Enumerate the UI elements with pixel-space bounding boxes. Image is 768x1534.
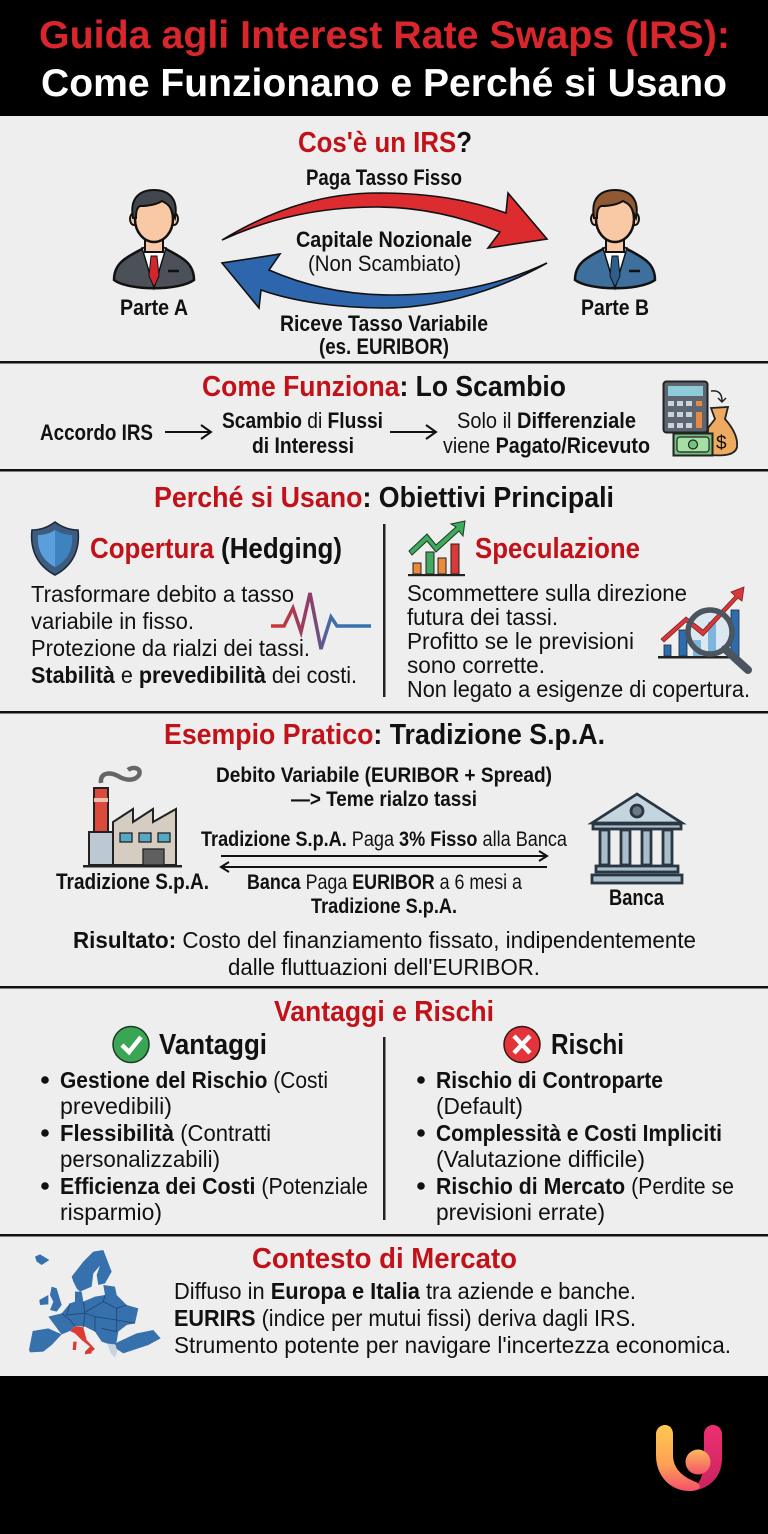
- body text: Scommettere sulla direzione: [407, 580, 687, 606]
- icon: logo: [656, 1425, 722, 1491]
- list: vantaggi: risparmio): [60, 1199, 162, 1225]
- icon: factory: [83, 768, 182, 868]
- list: rischi: previsioni errate): [436, 1199, 605, 1225]
- text: debito variabile: —> Teme rialzo tassi: [291, 788, 477, 811]
- heading: Vantaggi e Rischi: [274, 996, 494, 1028]
- column: copertura: [31, 522, 371, 688]
- icon: cross: [504, 1026, 540, 1062]
- subheading: rischi: Rischi: [551, 1029, 624, 1061]
- label: riceve tasso variabile: Riceve Tasso Variabile: [280, 311, 488, 336]
- list: rischi: (Default): [436, 1093, 523, 1119]
- text: risultato: dalle fluttuazioni dell'EURIBOR.: [228, 954, 540, 980]
- list: rischi: Complessità e Costi Impliciti: [436, 1120, 722, 1146]
- label: parte B: Parte B: [581, 295, 649, 320]
- panel: esempio pratico: [0, 711, 768, 987]
- text: market context: EURIRS (indice per mutui fissi) deriva dagli IRS.: [174, 1305, 636, 1331]
- subheading: copertura: Copertura (Hedging): [90, 533, 342, 565]
- body text: Trasformare debito a tasso: [31, 581, 294, 607]
- divider: [383, 1037, 386, 1220]
- text: debito variabile: Debito Variabile (EURIBOR + Spread): [216, 764, 552, 787]
- list: rischi: Rischio di Mercato (Perdite se: [436, 1173, 734, 1199]
- header band: [0, 0, 768, 116]
- title line 1: Guida agli Interest Rate Swaps (IRS):: [39, 14, 730, 57]
- label: es. euribor: (es. EURIBOR): [319, 334, 449, 359]
- label: parte A: Parte A: [120, 295, 188, 320]
- body text: sono corrette.: [407, 652, 545, 678]
- text: banca paga: [247, 871, 522, 918]
- step: solo il differenziale: viene Pagato/Ricevuto: [443, 433, 650, 458]
- step: accordo IRS: Accordo IRS: [40, 420, 153, 445]
- icon: europe map: [29, 1250, 161, 1358]
- arrow: step 1 to 2: [165, 425, 211, 439]
- step: solo il differenziale: [443, 408, 650, 458]
- label: banca: Banca: [609, 885, 665, 910]
- body text: Profitto se le previsioni: [407, 628, 634, 654]
- icon: magnifier chart: [658, 587, 748, 670]
- list: vantaggi: Efficienza dei Costi (Potenziale: [60, 1173, 368, 1199]
- step: scambio di flussi: Scambio di Flussi: [222, 408, 383, 433]
- step: scambio di flussi: [222, 408, 383, 458]
- panel: cos'è un IRS: [0, 116, 768, 362]
- body text: Stabilità e prevedibilità dei costi.: [31, 662, 357, 688]
- body text: [407, 580, 750, 702]
- list: vantaggi: prevedibili): [60, 1093, 172, 1119]
- panel: vantaggi e rischi: [0, 986, 768, 1235]
- list: rischi: [417, 1067, 734, 1225]
- heading: Cos'è un IRS?: [298, 127, 472, 159]
- text: banca paga: Banca Paga EURIBOR a 6 mesi a: [247, 871, 522, 894]
- footer band: [0, 1376, 768, 1534]
- text: risultato: [73, 927, 696, 980]
- heading: Esempio Pratico: Tradizione S.p.A.: [164, 719, 605, 751]
- text: market context: [174, 1278, 731, 1358]
- text: debito variabile: [216, 764, 552, 811]
- panel: perché si usano: [0, 469, 768, 712]
- list: rischi: (Valutazione difficile): [436, 1146, 645, 1172]
- arrow: red fixed rate: [222, 193, 547, 248]
- list: vantaggi: personalizzabili): [60, 1146, 220, 1172]
- body text: futura dei tassi.: [407, 604, 558, 630]
- step: solo il differenziale: Solo il Differenziale: [457, 408, 636, 433]
- text: banca paga: Tradizione S.p.A.: [311, 895, 457, 918]
- text: market context: Diffuso in Europa e Italia tra aziende e banche.: [174, 1278, 636, 1304]
- icon: person A: [114, 190, 194, 288]
- arrow: to company: [221, 862, 547, 872]
- list: vantaggi: Flessibilità (Contratti: [60, 1120, 271, 1146]
- arrow: to bank: [221, 851, 547, 861]
- body text: Non legato a esigenze di copertura.: [407, 676, 750, 702]
- label: paga tasso fisso: Paga Tasso Fisso: [306, 165, 462, 190]
- panel: contesto di mercato: [0, 1234, 768, 1376]
- heading: Come Funziona: Lo Scambio: [202, 371, 566, 403]
- icon: calculator and money: [664, 382, 737, 456]
- step: scambio di flussi: di Interessi: [252, 433, 354, 458]
- divider: [383, 524, 386, 697]
- body text: [31, 581, 357, 688]
- column: speculazione: [407, 521, 750, 702]
- icon: calculator and money: $: [716, 433, 727, 454]
- body text: variabile in fisso.: [31, 608, 194, 634]
- title line 2: Come Funzionano e Perché si Usano: [41, 62, 727, 105]
- body text: Protezione da rialzi dei tassi.: [31, 635, 310, 661]
- label: non scambiato: (Non Scambiato): [308, 251, 461, 276]
- text: market context: Strumento potente per navigare l'incertezza economica.: [174, 1332, 731, 1358]
- icon: pulse line: [271, 593, 371, 649]
- text: risultato: Risultato: Costo del finanziamento fissato, indipendentemente: [73, 927, 696, 953]
- panel: come funziona: [0, 361, 768, 470]
- heading: Contesto di Mercato: [252, 1243, 517, 1275]
- label: capitale nozionale: Capitale Nozionale: [296, 227, 472, 252]
- list: rischi: Rischio di Controparte: [436, 1067, 663, 1093]
- list: vantaggi: Gestione del Rischio (Costi: [60, 1067, 328, 1093]
- arrow: blue variable rate: [222, 254, 547, 308]
- icon: check: [113, 1026, 149, 1062]
- heading: Perché si Usano: Obiettivi Principali: [154, 482, 614, 514]
- icon: growth chart: [408, 521, 465, 576]
- arrow: step 2 to 3: [390, 425, 436, 439]
- icon: bank: [592, 794, 682, 883]
- subheading: vantaggi: Vantaggi: [159, 1029, 267, 1061]
- icon: person B: [575, 190, 655, 288]
- list: vantaggi: [41, 1067, 368, 1225]
- icon: shield: [32, 522, 78, 575]
- label: tradizione: Tradizione S.p.A.: [56, 869, 209, 894]
- subheading: speculazione: Speculazione: [475, 533, 640, 565]
- text: tradizione paga: Tradizione S.p.A. Paga 3% Fisso alla Banca: [201, 828, 567, 851]
